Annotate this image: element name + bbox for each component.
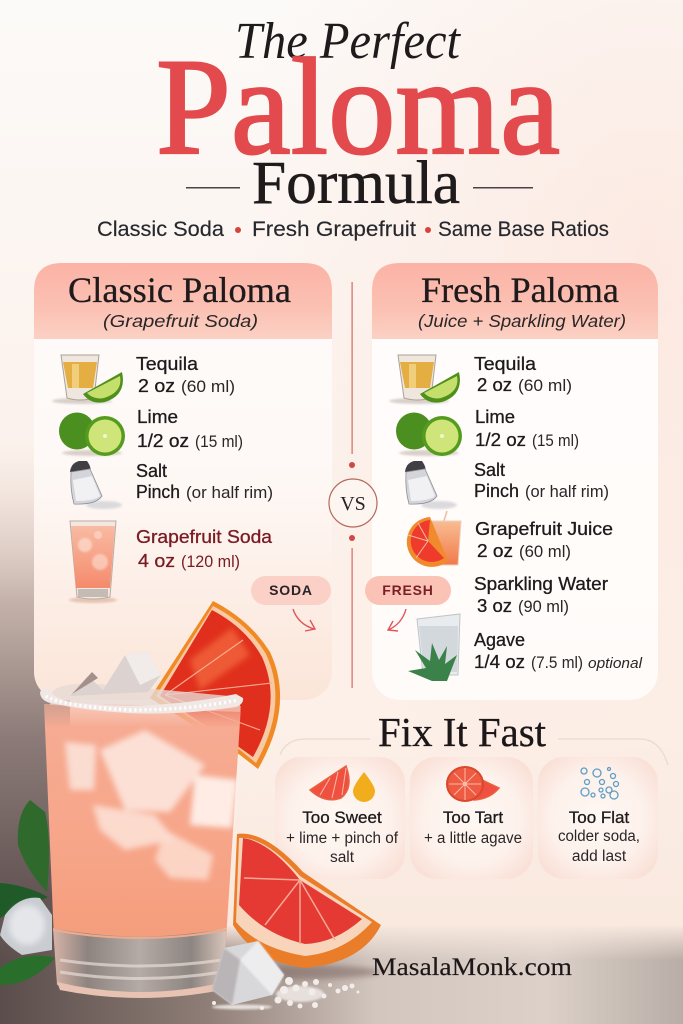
ingredient: tequila — [136, 353, 235, 396]
icon: lime — [396, 412, 462, 456]
ingredient: lime: 1/2 oz — [137, 430, 189, 451]
ingredient: sparkling water: (90 ml) — [518, 598, 569, 616]
ingredient: grapefruit juice — [475, 518, 613, 561]
ingredient: salt: Salt — [136, 460, 167, 481]
ingredient: tequila: (60 ml) — [518, 377, 572, 395]
ingredient: sparkling water: 3 oz — [477, 595, 512, 616]
ingredient: lime — [475, 406, 579, 450]
ingredient: tequila: (60 ml) — [181, 378, 235, 396]
heading: fix it fast — [280, 709, 668, 765]
fix card: too flat: add last — [572, 848, 627, 865]
back rim and ice above glass — [50, 651, 240, 712]
subtitle: Same Base Ratios — [438, 218, 609, 241]
icon: lime — [59, 412, 125, 456]
glass base — [53, 928, 226, 994]
ingredient: salt: (or half rim) — [525, 483, 609, 501]
counter surface — [0, 925, 683, 1024]
fix card: too flat — [538, 757, 658, 879]
icon: sparkling water and agave — [408, 614, 460, 681]
icon: tequila and lime — [52, 355, 123, 404]
cocktail glass — [40, 651, 243, 998]
badge: soda — [251, 576, 331, 605]
fix card: too sweet — [275, 757, 405, 879]
icon: bubbles — [581, 768, 618, 799]
panel header: classic — [34, 263, 332, 339]
ice cubes and frost in glass — [65, 730, 238, 880]
icon: tequila and lime — [389, 355, 460, 404]
fix card: too tart: + a little agave — [424, 830, 522, 847]
arrow: fresh — [388, 609, 406, 631]
ice cube on counter — [212, 941, 284, 1005]
vs divider — [329, 282, 377, 688]
icon: soda glass — [69, 521, 117, 603]
ingredient: salt — [474, 459, 609, 501]
fix card: too tart — [410, 757, 533, 879]
ingredient: grapefruit soda: (120 ml) — [181, 553, 240, 571]
icon: grapefruit juice — [407, 511, 461, 567]
ingredient: lime: 1/2 oz — [475, 429, 526, 450]
icon: salt shaker — [70, 461, 122, 509]
fix card: too flat: Too Flat — [569, 808, 630, 827]
panel header: fresh — [372, 263, 658, 339]
title line: Paloma: Paloma — [156, 30, 560, 183]
heading: fix it fast: Fix It Fast — [378, 709, 547, 755]
panel header: classic: Classic Paloma — [68, 270, 291, 310]
ingredient: lime: Lime — [137, 406, 178, 427]
ingredient: sparkling water: Sparkling Water — [474, 573, 608, 594]
icon: grapefruit halves — [447, 767, 499, 801]
ingredient: grapefruit soda — [136, 526, 273, 571]
ingredient: salt: Pinch — [136, 481, 180, 502]
ingredient: grapefruit juice: 2 oz — [477, 540, 513, 561]
icon: grapefruit and honey drop — [310, 766, 375, 802]
glass liquid — [44, 704, 241, 940]
panel header: fresh: (Juice + Sparkling Water) — [418, 311, 626, 331]
spilled salt — [212, 977, 360, 1010]
ingredient: salt: Pinch — [474, 480, 519, 501]
ingredient: grapefruit soda: 4 oz — [138, 550, 175, 571]
badge: soda: SODA — [269, 582, 313, 598]
ingredient: lime — [137, 406, 243, 451]
grapefruit wedge garnish — [150, 601, 280, 769]
icon: salt shaker — [405, 461, 457, 509]
panel: classic paloma — [34, 263, 332, 700]
fix card: too sweet: + lime + pinch of — [286, 830, 399, 847]
subtitle — [97, 218, 609, 241]
subtitle: Fresh Grapefruit — [252, 218, 416, 241]
website: MasalaMonk.com — [372, 954, 573, 981]
vs divider: VS — [340, 493, 366, 515]
ingredient: agave: Agave — [474, 629, 525, 650]
badge: fresh — [365, 576, 451, 605]
fix card: too sweet: Too Sweet — [302, 808, 382, 827]
panel: fresh paloma — [365, 263, 658, 700]
badge: fresh: FRESH — [382, 582, 434, 598]
fix card: too sweet: salt — [330, 849, 355, 866]
ingredient: sparkling water — [474, 573, 608, 616]
ingredient: salt: Salt — [474, 459, 505, 480]
ingredient: grapefruit juice: (60 ml) — [519, 543, 571, 561]
subtitle: Classic Soda — [97, 218, 224, 241]
ingredient: tequila — [474, 353, 572, 395]
ingredient: tequila: Tequila — [136, 353, 199, 374]
ingredient: salt: (or half rim) — [186, 484, 273, 502]
grapefruit wedge on counter — [230, 834, 381, 979]
ingredient: agave: (7.5 ml) — [531, 654, 583, 672]
ingredient: lime: Lime — [475, 406, 515, 427]
fix card: too flat: colder soda, — [558, 828, 640, 845]
leaves — [0, 800, 55, 985]
panel header: fresh: Fresh Paloma — [421, 270, 619, 310]
title line: The Perfect: The Perfect — [235, 13, 461, 70]
arrow: soda — [293, 609, 315, 631]
title line: Formula: Formula — [252, 150, 460, 217]
ingredient: grapefruit juice: Grapefruit Juice — [475, 518, 613, 539]
salted rim — [40, 686, 243, 714]
fix card: too tart: Too Tart — [443, 808, 503, 827]
title — [156, 13, 560, 217]
ingredient: grapefruit soda: Grapefruit Soda — [136, 526, 273, 547]
ingredient: lime: (15 ml) — [195, 433, 243, 451]
ingredient: agave: optional — [588, 655, 643, 672]
ice cube left — [0, 898, 52, 955]
ingredient: tequila: Tequila — [474, 353, 537, 374]
panel header: classic: (Grapefruit Soda) — [103, 311, 258, 331]
ingredient: lime: (15 ml) — [532, 432, 579, 450]
ingredient: agave: 1/4 oz — [474, 651, 525, 672]
ingredient: agave — [474, 629, 643, 672]
ingredient: tequila: 2 oz — [477, 374, 512, 395]
ingredient: tequila: 2 oz — [138, 375, 175, 396]
ingredient: salt — [136, 460, 273, 502]
